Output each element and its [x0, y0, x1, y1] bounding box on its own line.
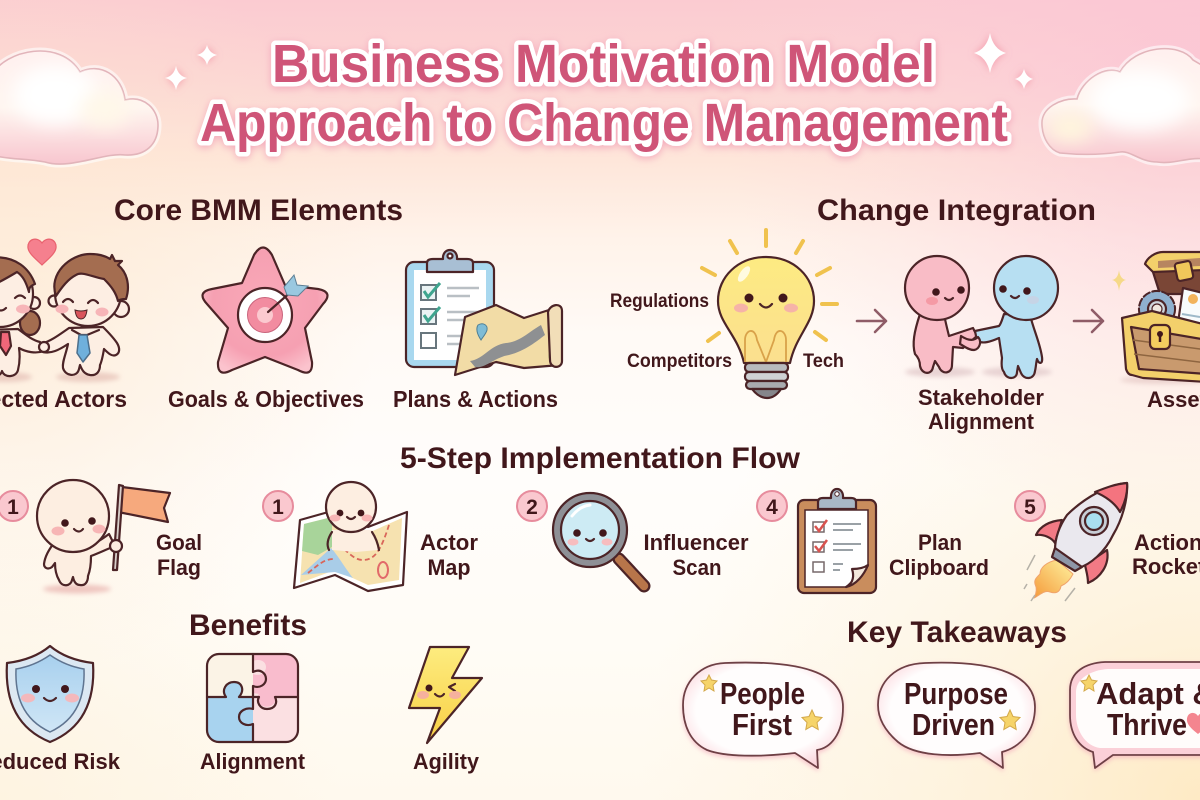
speech bubble: purpose driven: Driven [912, 707, 995, 742]
icon: shield [7, 646, 93, 742]
icon: puzzle [207, 654, 298, 742]
icon: magnifier [553, 493, 644, 586]
icon: clipboard and map [406, 250, 562, 375]
speech bubble: people first: First [732, 707, 792, 742]
step 3 badge: 2 [526, 496, 538, 519]
label: competitors: Competitors [627, 351, 732, 372]
label: goals: Goals & Objectives [168, 386, 364, 412]
step 2 badge: 1 [272, 496, 284, 519]
label: plans: Plans & Actions [393, 386, 558, 412]
icon: lightning bolt [409, 647, 482, 743]
step 4 badge [757, 491, 787, 521]
step 5 badge: 5 [1024, 496, 1036, 519]
cloud left [0, 51, 158, 164]
title [200, 34, 1008, 153]
icon: actors holding hands [0, 239, 129, 382]
step 1 badge: 1 [7, 496, 19, 519]
label: scan: Scan [672, 555, 722, 580]
icon: star with target [203, 248, 327, 373]
label: goal: Goal [156, 530, 202, 555]
label: tech: Tech [803, 351, 844, 372]
heading: key takeaways: Key Takeaways [847, 616, 1067, 649]
speech bubble: purpose driven: Purpose [904, 676, 1008, 711]
title: Approach to Change Management [200, 93, 1008, 153]
icon: actor map [294, 482, 407, 591]
heading: change integration: Change Integration [817, 194, 1096, 227]
icon: plan clipboard [798, 489, 876, 593]
speech bubble: people first [683, 663, 843, 768]
label: flag: Flag [157, 555, 201, 580]
icon: treasure chest [1112, 252, 1200, 384]
speech bubble: people first: People [720, 676, 805, 711]
sparkles [165, 33, 1033, 90]
step 1 badge [0, 491, 28, 521]
step 4 badge: 4 [766, 496, 778, 519]
heading: benefits: Benefits [189, 609, 307, 642]
step 5 badge [1015, 491, 1045, 521]
label: influencer: Influencer [644, 530, 749, 555]
label: alignment: Alignment [200, 749, 306, 774]
cloud right [1042, 49, 1200, 163]
icon: stakeholders shaking hands [905, 256, 1058, 378]
speech bubble: purpose driven [878, 663, 1035, 768]
icon: action rocket [1024, 483, 1127, 601]
icon: goal flag character [37, 480, 170, 594]
icon: idea light bulb [702, 230, 837, 398]
arrow: influences to stakeholders [857, 310, 886, 332]
label: plan: Plan [918, 530, 962, 555]
speech bubble: adapt and thrive: Thrive [1107, 707, 1187, 742]
label: clipboard: Clipboard [889, 555, 989, 580]
title: Business Motivation Model [272, 34, 935, 94]
heading: core elements: Core BMM Elements [114, 194, 403, 227]
label: regulations: Regulations [610, 291, 709, 312]
heading: implementation flow: 5-Step Implementation Flow [400, 442, 801, 475]
arrow: stakeholders to assets [1074, 310, 1103, 332]
label: alignment: Alignment [928, 409, 1035, 434]
label: map: Map [428, 555, 470, 580]
step 3 badge [517, 491, 547, 521]
step 2 badge [263, 491, 293, 521]
label: agility: Agility [413, 749, 480, 774]
label: actor: Actor [420, 530, 478, 555]
label: stakeholder: Stakeholder [918, 385, 1044, 410]
speech bubble: adapt and thrive [1070, 662, 1200, 768]
